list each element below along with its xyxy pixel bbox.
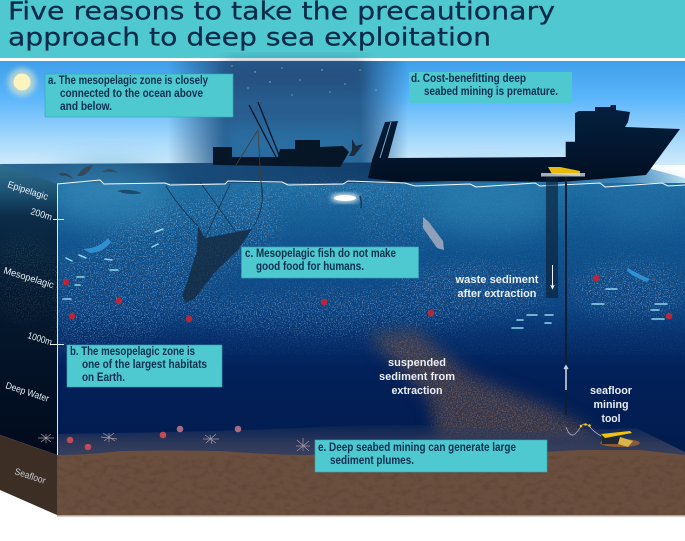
depth tick 200m: 200m	[29, 206, 53, 223]
title text: approach to deep sea exploitation	[8, 22, 491, 52]
arrow: waste sediment going down	[551, 265, 554, 288]
callout d	[409, 72, 572, 103]
depth tick 1000m: 1000m	[26, 330, 53, 348]
zone label deep water: Deep Water	[4, 380, 50, 405]
mesopelagic fish shoal speckle	[0, 176, 685, 355]
callout e: sediment plumes.	[330, 455, 414, 467]
blue fish right	[627, 268, 650, 282]
callout e: e. Deep seabed mining can generate large	[318, 442, 516, 454]
fishing net	[166, 181, 262, 303]
ship yellow lifting gear	[541, 167, 585, 176]
label: seafloor mining tool: seafloor	[590, 385, 633, 397]
callout c: good food for humans.	[256, 261, 364, 273]
dolphins above the surface	[58, 165, 118, 179]
starfish	[38, 433, 310, 451]
stars in the night sky	[231, 65, 377, 96]
callout b: b. The mesopelagic zone is	[70, 346, 195, 358]
arrow: ore going up	[564, 366, 568, 390]
fishing boat silhouette	[213, 102, 349, 200]
lanternfish dashes	[63, 229, 667, 328]
blue fish left	[83, 238, 111, 253]
callout d: seabed mining is premature.	[424, 86, 558, 98]
label: waste sediment	[454, 274, 539, 300]
callout d: d. Cost-benefitting deep	[411, 73, 526, 85]
label: suspended sediment: extraction	[392, 385, 443, 397]
sea surface wave line	[57, 180, 685, 187]
front water column	[50, 165, 685, 458]
sun	[8, 68, 36, 96]
callout e	[315, 440, 547, 472]
zone label seafloor: Seafloor	[13, 466, 47, 487]
callout c	[242, 247, 418, 278]
seafloor side face	[0, 435, 57, 515]
label: seafloor mining tool: mining	[594, 399, 628, 411]
krill chain	[423, 217, 444, 250]
depth axis line	[56, 184, 58, 455]
label: waste sediment: waste sediment	[454, 274, 539, 286]
large fish near surface	[331, 194, 361, 208]
seabird	[349, 139, 363, 156]
callout a	[45, 74, 233, 117]
callout a: a. The mesopelagic zone is closely	[48, 75, 209, 87]
label: seafloor mining tool: tool	[602, 413, 620, 425]
zone label mesopelagic: Mesopelagic	[2, 265, 55, 291]
callout a: connected to the ocean above	[60, 88, 203, 100]
callout b: on Earth.	[82, 372, 125, 384]
callout b: one of the largest habitats	[82, 359, 207, 371]
red jellyfish	[63, 275, 672, 322]
sea surface seen from above	[0, 162, 685, 190]
callout a: and below.	[60, 101, 112, 113]
seafloor front face	[57, 450, 685, 516]
left side face of the ocean block	[0, 164, 57, 455]
seabed sediment band	[57, 425, 685, 460]
sediment plume	[366, 322, 598, 444]
callout b	[67, 345, 222, 387]
deep sea mining ship	[368, 105, 680, 182]
seafloor mining tool	[566, 423, 640, 447]
bottom jellyfish	[67, 426, 241, 450]
white stripe on ship stern	[380, 122, 391, 158]
sky background	[0, 61, 685, 165]
zone label epipelagic: Epipelagic	[6, 179, 50, 203]
title text	[8, 0, 555, 52]
callout c: c. Mesopelagic fish do not make	[245, 248, 396, 260]
label: seafloor mining tool	[590, 385, 633, 425]
label: waste sediment: after extraction	[458, 288, 537, 300]
label: suspended sediment: sediment from	[379, 371, 455, 383]
dolphin under water	[117, 190, 142, 194]
title banner	[0, 0, 685, 58]
riser pipes	[546, 177, 567, 415]
label: suspended sediment	[379, 357, 455, 397]
label: suspended sediment: suspended	[388, 357, 446, 369]
